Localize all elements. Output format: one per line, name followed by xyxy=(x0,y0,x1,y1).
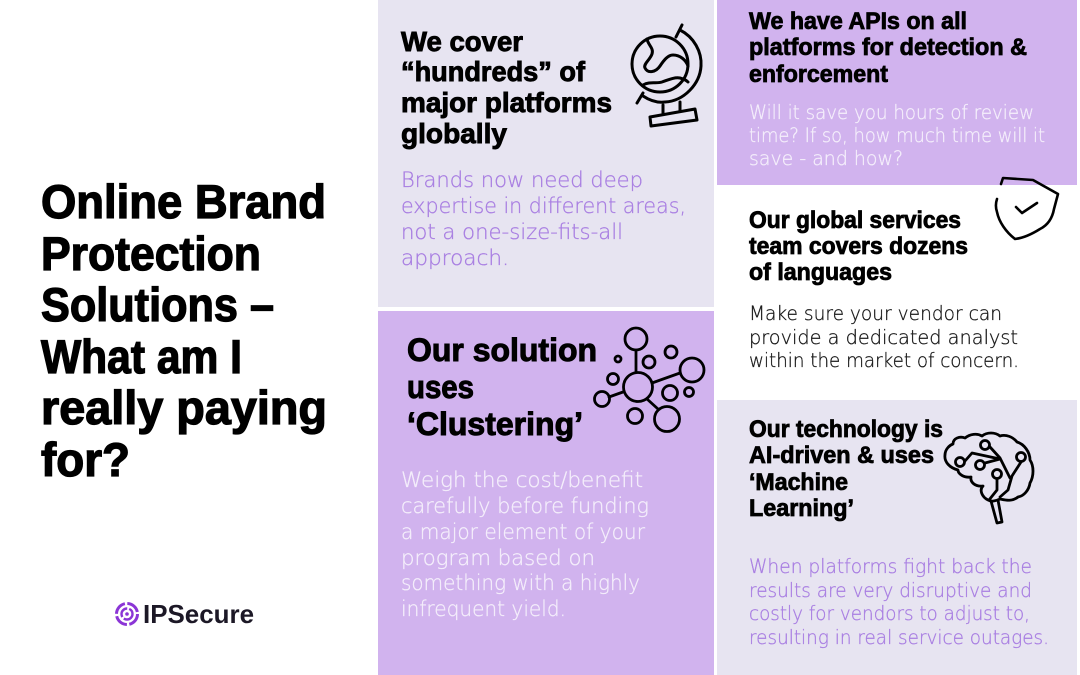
icon: globe xyxy=(632,25,701,126)
panel: APIs xyxy=(717,0,1077,185)
text: clustering: infrequent yield. xyxy=(401,597,566,622)
text: APIs xyxy=(749,101,1045,170)
heading: languages xyxy=(749,207,968,286)
text: clustering: carefully before funding xyxy=(401,494,649,519)
text: machine learning: costly for vendors to adjust to, xyxy=(749,602,1030,625)
text: APIs: time? If so, how much time will it xyxy=(749,124,1045,147)
text: machine learning: resulting in real service outages. xyxy=(749,626,1049,649)
heading: hundreds of platforms xyxy=(401,26,612,149)
text: clustering: Weigh the cost/benefit xyxy=(401,468,643,493)
heading: machine learning: Learning’ xyxy=(749,495,854,522)
text: hundreds of platforms: Brands now need deep xyxy=(401,168,643,193)
panel: languages xyxy=(717,178,1077,400)
text: machine learning xyxy=(749,555,1049,649)
icon: brain xyxy=(945,433,1033,523)
heading: hundreds of platforms: We cover xyxy=(401,26,523,57)
heading: clustering: uses xyxy=(407,369,474,405)
heading: APIs: We have APIs on all xyxy=(749,8,967,35)
heading: machine learning: Our technology is xyxy=(749,416,943,443)
text: languages: Make sure your vendor can xyxy=(749,302,1002,325)
heading: APIs: platforms for detection & xyxy=(749,34,1027,61)
heading: machine learning: AI-driven & uses xyxy=(749,442,934,469)
panel: clustering xyxy=(378,311,714,675)
icon: logo target xyxy=(116,604,138,624)
text: clustering: something with a highly xyxy=(401,571,640,596)
text: clustering: a major element of your xyxy=(401,520,645,545)
logo: IPSecure xyxy=(116,599,254,629)
text: clustering: program based on xyxy=(401,546,595,571)
text: machine learning: results are very disruptive and xyxy=(749,579,1032,602)
text: APIs: Will it save you hours of review xyxy=(749,101,1034,124)
heading: hundreds of platforms: globally xyxy=(401,118,507,149)
text: languages: provide a dedicated analyst xyxy=(749,326,1018,349)
heading: APIs xyxy=(749,8,1027,88)
panel: machine learning xyxy=(717,400,1077,675)
title: really paying xyxy=(41,381,327,434)
text: APIs: save - and how? xyxy=(749,147,903,170)
icon: network cluster xyxy=(594,328,704,432)
title xyxy=(41,175,327,486)
title: Online Brand xyxy=(41,175,326,228)
heading: clustering xyxy=(407,332,597,442)
heading: languages: Our global services xyxy=(749,207,961,234)
logo wordmark: IPSecure xyxy=(143,599,254,629)
text: hundreds of platforms: approach. xyxy=(401,246,509,271)
text: languages xyxy=(749,302,1019,372)
heading: machine learning: ‘Machine xyxy=(749,469,848,496)
text: machine learning: When platforms fight back the xyxy=(749,555,1032,578)
heading: clustering: Our solution xyxy=(407,332,597,368)
heading: APIs: enforcement xyxy=(749,61,888,88)
text: hundreds of platforms xyxy=(401,168,686,271)
text: hundreds of platforms: expertise in different areas, xyxy=(401,194,686,219)
panel: hundreds of platforms xyxy=(378,0,714,307)
text: hundreds of platforms: not a one-size-fits-all xyxy=(401,220,623,245)
title: for? xyxy=(41,433,130,486)
text: clustering xyxy=(401,468,649,622)
heading: machine learning xyxy=(749,416,943,522)
text: languages: within the market of concern. xyxy=(749,349,1019,372)
heading: hundreds of platforms: “hundreds” of xyxy=(401,56,586,87)
icon: shield check xyxy=(996,178,1058,239)
heading: hundreds of platforms: major platforms xyxy=(401,87,612,118)
title: Protection xyxy=(41,227,261,280)
heading: languages: team covers dozens xyxy=(749,233,968,260)
heading: clustering: ‘Clustering’ xyxy=(407,406,583,442)
heading: languages: of languages xyxy=(749,259,892,286)
title: Solutions – xyxy=(41,278,274,331)
title: What am I xyxy=(41,330,242,383)
